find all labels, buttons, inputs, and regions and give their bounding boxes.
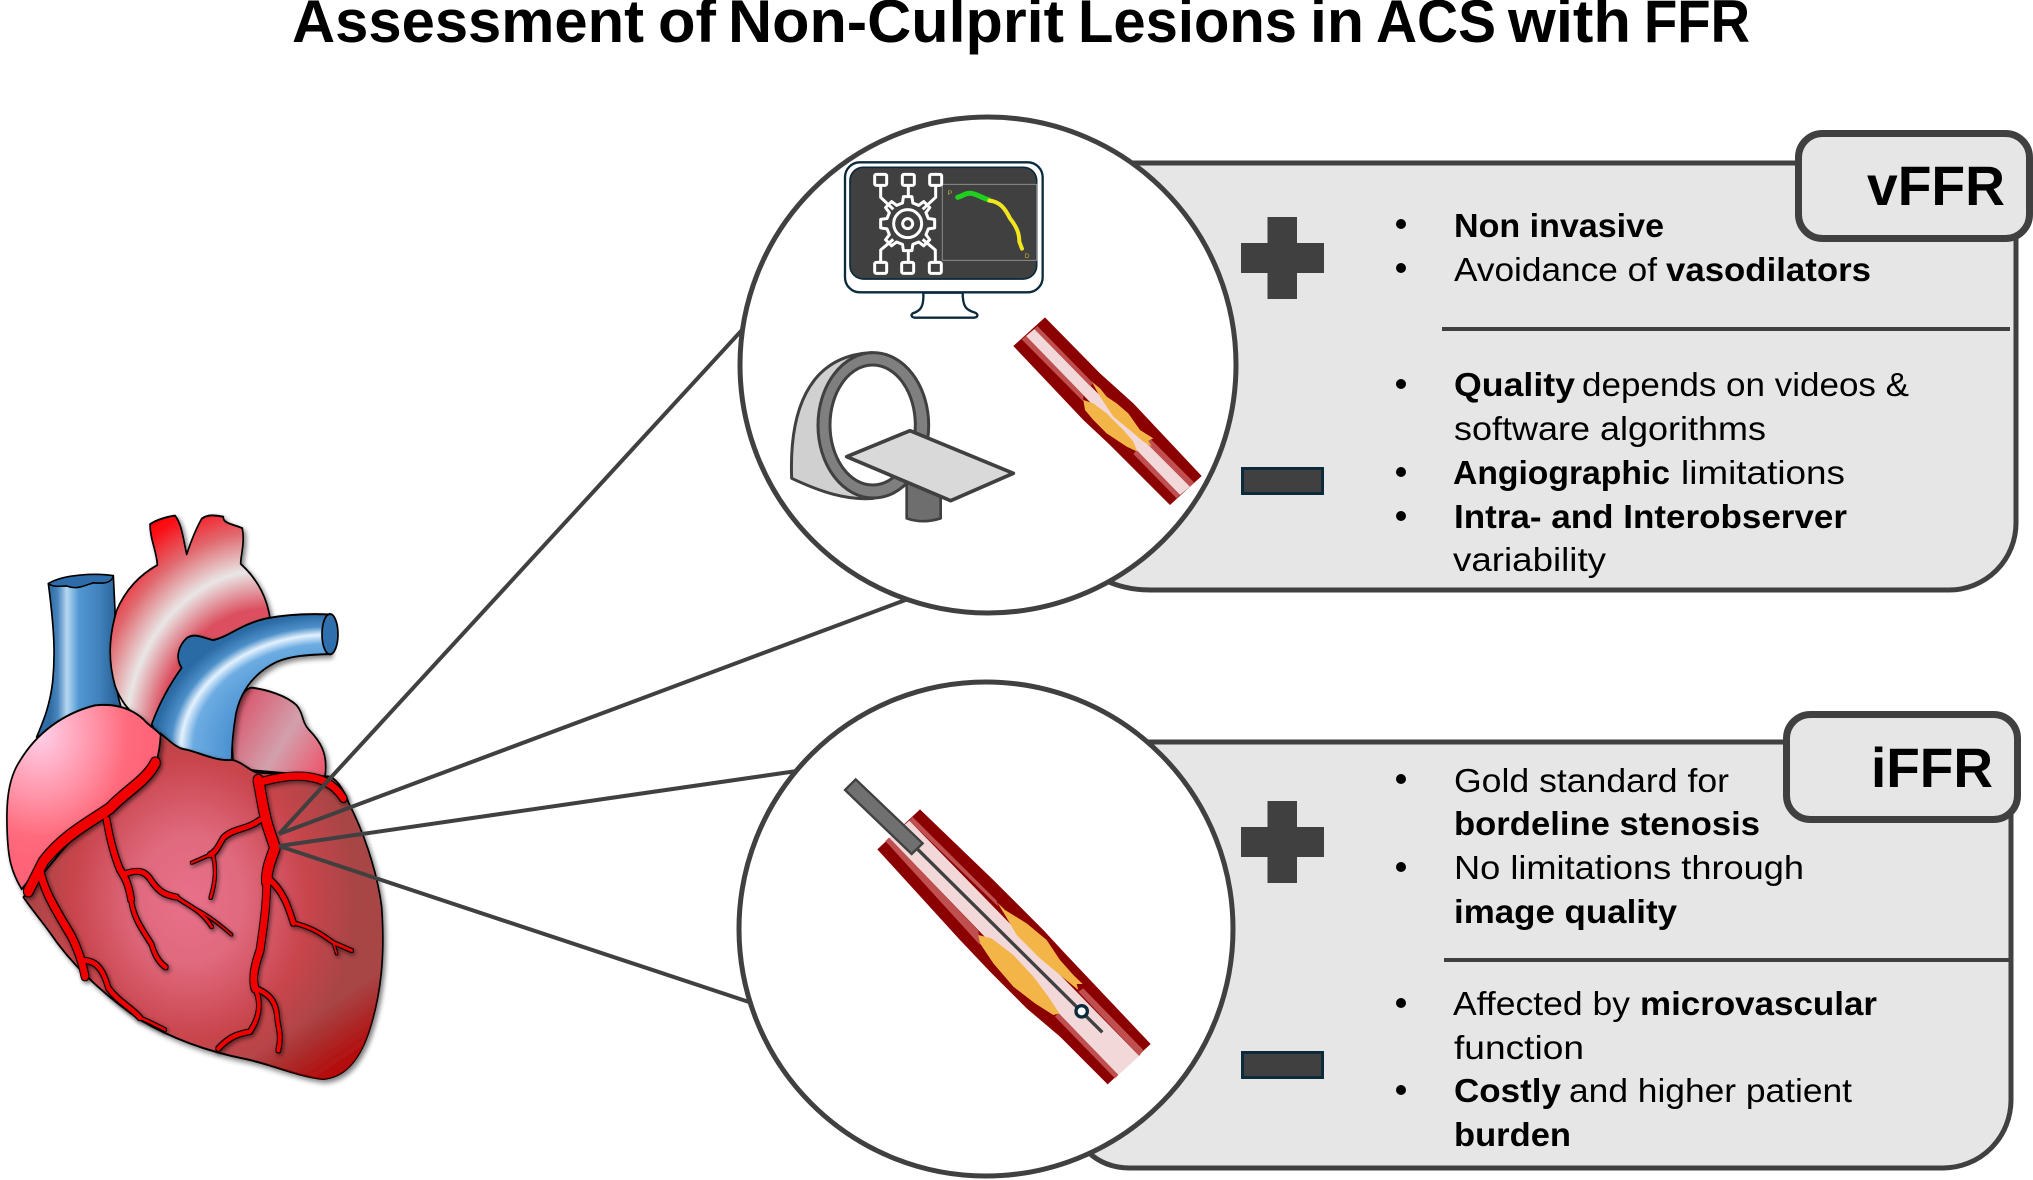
icon: plus	[1241, 801, 1324, 883]
connector lines from heart to circles	[279, 330, 908, 1003]
advantages list: Avoidance of	[1454, 251, 1658, 288]
icon: monitor with AI gear and vessel: D	[1025, 253, 1030, 260]
limitations list: Angiographic	[1453, 454, 1670, 491]
divider	[1442, 327, 2010, 331]
advantages list	[1396, 207, 1871, 288]
back left atrium	[232, 688, 326, 777]
circle: iFFR illustration	[739, 682, 1233, 1176]
pulmonary artery	[152, 614, 330, 761]
right atrium	[7, 705, 161, 889]
ventricle	[23, 733, 383, 1079]
limitations list: Affected by	[1453, 985, 1631, 1022]
limitations list: burden	[1454, 1116, 1571, 1153]
limitations list: and higher patient	[1569, 1072, 1852, 1109]
limitations list: Intra- and Interobserver	[1454, 498, 1847, 535]
label tab: iFFR: iFFR	[1871, 736, 1993, 799]
label tab: vFFR	[1798, 134, 2030, 238]
advantages list: vasodilators	[1666, 251, 1871, 288]
advantages list: Non invasive	[1454, 207, 1664, 244]
icon: CT scanner	[791, 353, 1013, 521]
advantages list: bordeline stenosis	[1454, 805, 1760, 842]
icon: stenosed vessel	[1013, 317, 1202, 505]
limitations list	[1396, 366, 1909, 578]
icon: minus	[1242, 468, 1322, 494]
coronary arteries	[28, 763, 352, 1050]
advantages list	[1396, 762, 1804, 930]
limitations list: Quality	[1454, 366, 1576, 403]
label tab: vFFR: vFFR	[1867, 154, 2005, 217]
divider	[1444, 958, 2011, 962]
icon: heart	[7, 515, 383, 1079]
circle: vFFR illustration	[740, 117, 1236, 613]
panel background	[1000, 163, 2016, 590]
pulmonary artery opening	[322, 614, 338, 654]
icon: vessel with stenosis	[877, 809, 1151, 1084]
limitations list: depends on videos &	[1582, 366, 1909, 403]
icon: monitor with AI gear and vessel: P	[948, 190, 953, 197]
limitations list: microvascular	[1640, 985, 1877, 1022]
icon: plus	[1241, 217, 1324, 299]
panel background	[1000, 742, 2011, 1168]
superior vena cava	[37, 574, 123, 737]
advantages list: No limitations through	[1454, 849, 1804, 886]
panel: iFFR	[1000, 714, 2018, 1168]
icon: pressure wire with catheter	[845, 779, 1102, 1032]
limitations list: software algorithms	[1454, 410, 1766, 447]
advantages list: image quality	[1454, 893, 1678, 930]
label tab: iFFR	[1786, 714, 2018, 820]
limitations list: limitations	[1681, 454, 1845, 491]
limitations list: variability	[1453, 541, 1607, 578]
icon: monitor with AI gear and vessel	[845, 162, 1043, 318]
limitations list	[1396, 985, 1877, 1153]
icon: minus	[1242, 1052, 1322, 1078]
limitations list: function	[1454, 1029, 1584, 1066]
aorta	[110, 515, 270, 733]
limitations list: Costly	[1454, 1072, 1562, 1109]
panel: vFFR	[1000, 134, 2030, 590]
advantages list: Gold standard for	[1454, 762, 1729, 799]
